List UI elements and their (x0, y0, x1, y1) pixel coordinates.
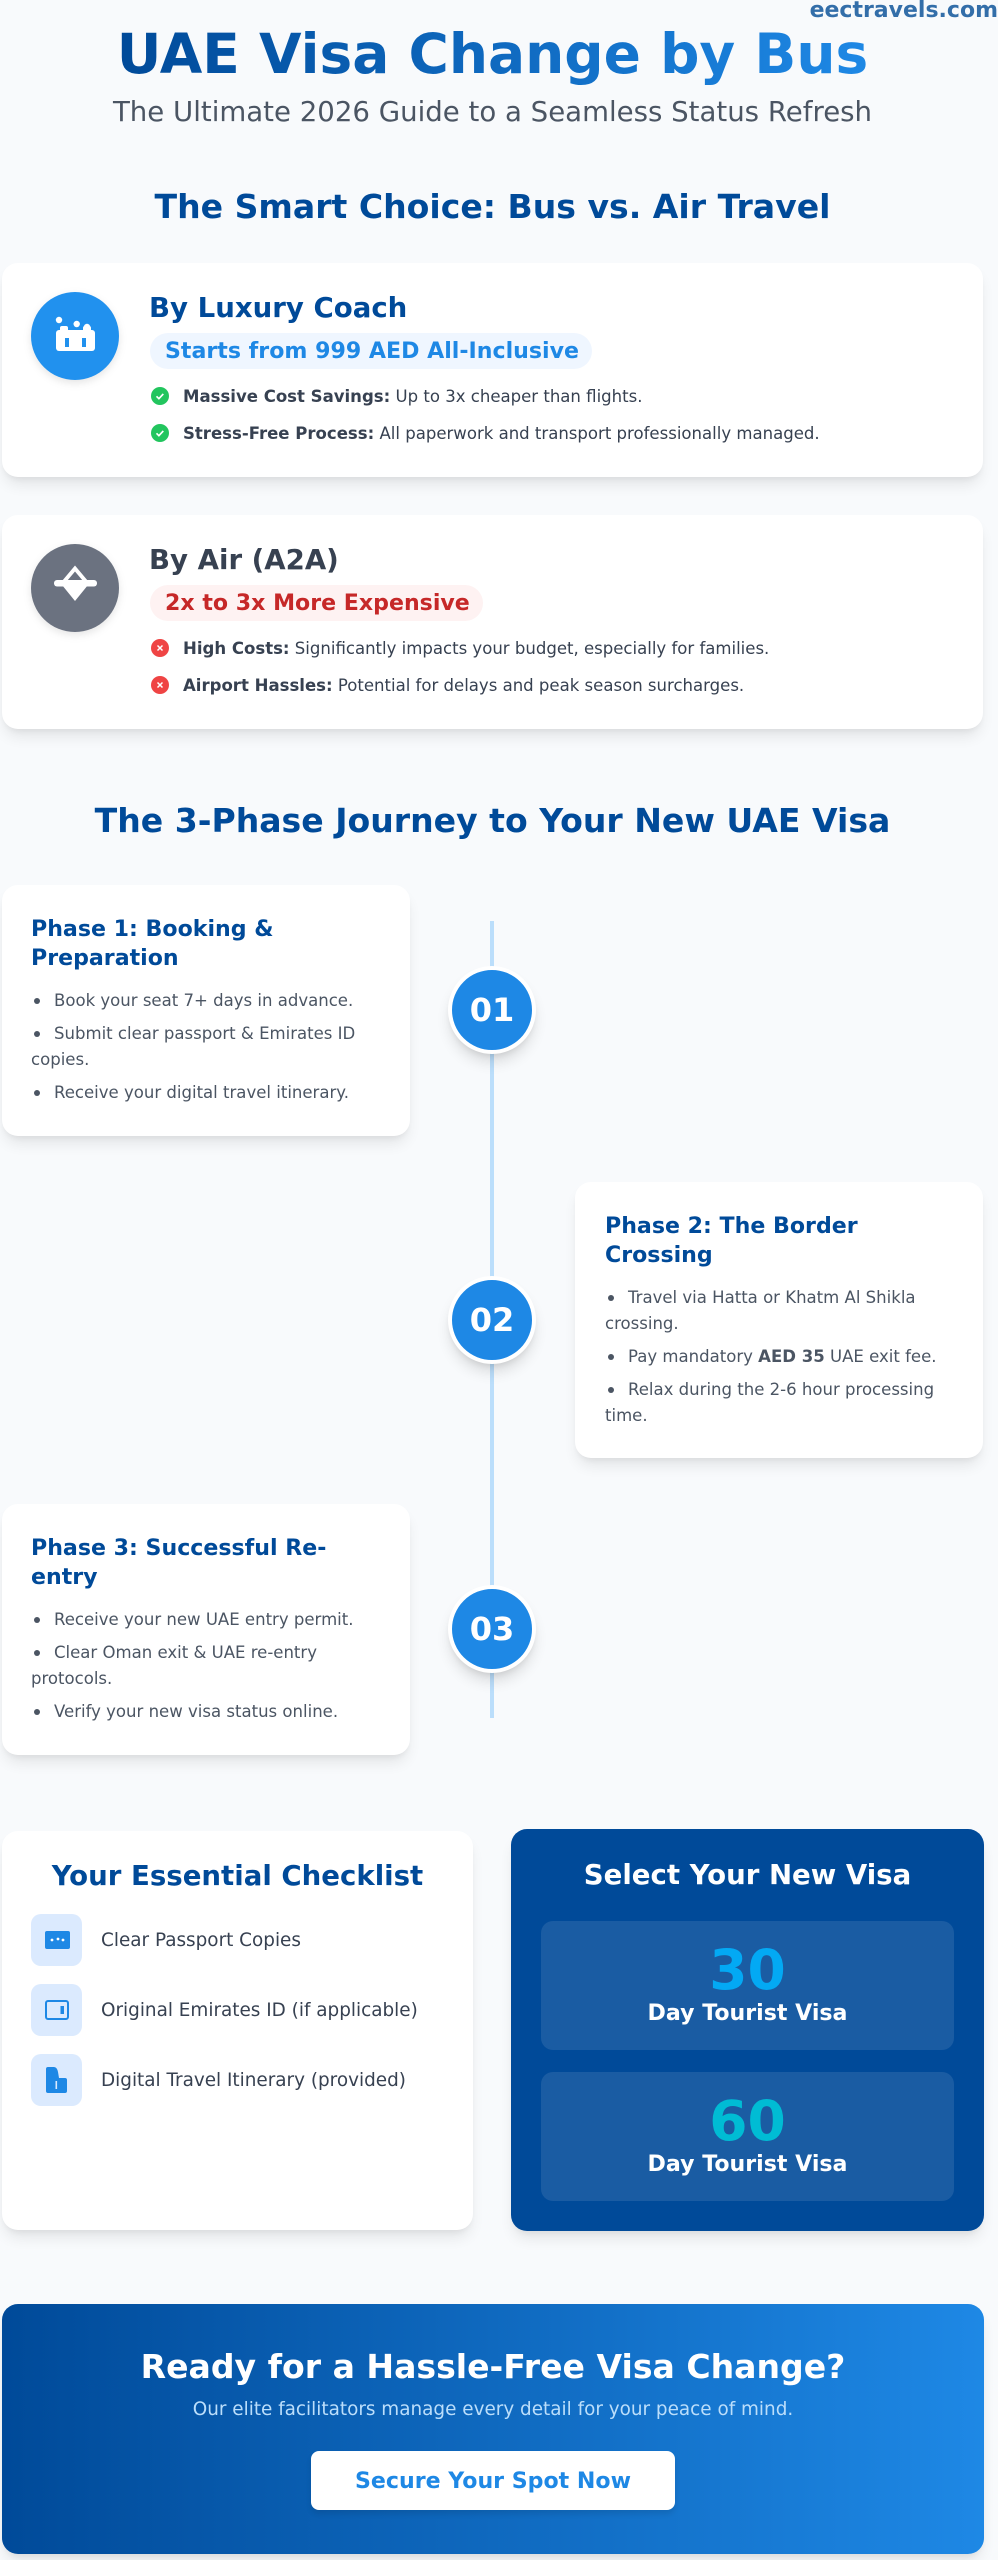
cta heading: Ready for a Hassle-Free Visa Change? (141, 2347, 845, 2386)
panel: checklist (2, 1831, 473, 2230)
icon: emirates id (31, 1984, 82, 2036)
cta text: Our elite facilitators manage every detail for your peace of mind. (193, 2399, 793, 2420)
heading: air: By Air (A2A) (149, 543, 339, 576)
phase 3 heading: entry (31, 1564, 98, 1590)
number 30: 30 (709, 1938, 786, 2002)
phase 2 list: crossing. (605, 1314, 679, 1333)
label 30: Day Tourist Visa (648, 2000, 847, 2026)
visa option: 30 day (541, 1921, 954, 2050)
drawback: high costs: High Costs: Significantly impacts your budget, especially for families. (183, 639, 769, 658)
checklist heading: Your Essential Checklist (52, 1859, 423, 1892)
heading: coach: By Luxury Coach (149, 291, 407, 324)
phase 3 heading: Phase 3: Successful Re- (31, 1535, 326, 1561)
step number 02: 02 (470, 1301, 514, 1339)
phase 3 heading (31, 1535, 326, 1590)
icon: plane (30, 544, 120, 636)
step number 01: 01 (470, 991, 514, 1029)
price pill: coach: Starts from 999 AED All-Inclusive (165, 338, 579, 364)
price pill: air: 2x to 3x More Expensive (165, 590, 470, 616)
step number 03 (448, 1585, 536, 1673)
panel: by luxury coach (2, 263, 983, 477)
timeline line (490, 921, 494, 1718)
benefit: cost savings: Massive Cost Savings: Up to 3x cheaper than flights. (183, 387, 642, 406)
phase 2 list: Relax during the 2-6 hour processing (628, 1380, 934, 1399)
heading: journey: The 3-Phase Journey to Your New UAE Visa (95, 801, 890, 840)
phase 2 heading (605, 1213, 858, 1268)
panel: phase 1 (2, 885, 410, 1136)
visa option: 60 day (541, 2072, 954, 2201)
panel: phase 3 (2, 1504, 410, 1755)
label 60: Day Tourist Visa (648, 2151, 847, 2177)
subtitle: The Ultimate 2026 Guide to a Seamless Status Refresh (113, 95, 872, 128)
phase 2 list (605, 1288, 937, 1425)
phase 3 list (31, 1610, 354, 1721)
phase 1 list: Receive your digital travel itinerary. (54, 1083, 349, 1102)
phase 3 list: Receive your new UAE entry permit. (54, 1610, 354, 1629)
phase 1 heading (31, 916, 274, 971)
price pill: air (150, 585, 483, 621)
title: UAE Visa Change by Bus (117, 22, 868, 86)
panel: phase 2 (575, 1182, 983, 1458)
cta button (311, 2451, 675, 2510)
panel: by air (2, 515, 983, 729)
phase 1 heading: Preparation (31, 945, 179, 971)
visa heading: Select Your New Visa (584, 1858, 911, 1891)
phase 1 list (31, 991, 355, 1102)
icon: itinerary (31, 2054, 82, 2106)
phase 1 list: copies. (31, 1050, 89, 1069)
drawback: airport hassles: Airport Hassles: Potential for delays and peak season surcharges. (183, 676, 744, 695)
phase 1 list: Submit clear passport & Emirates ID (54, 1024, 355, 1043)
phase 3 list: Verify your new visa status online. (54, 1702, 338, 1721)
heading: smart choice: The Smart Choice: Bus vs. Air Travel (155, 187, 830, 226)
number 60: 60 (709, 2089, 786, 2153)
icon: passport (31, 1914, 82, 1966)
panel: select visa (511, 1829, 984, 2231)
phase 2 heading: Crossing (605, 1242, 713, 1268)
price pill: coach (150, 333, 592, 369)
cta button: Secure Your Spot Now (355, 2468, 631, 2494)
phase 1 heading: Phase 1: Booking & (31, 916, 274, 942)
checklist item: emirates id: Original Emirates ID (if applicable) (101, 2000, 418, 2021)
phase 2 list: Pay mandatory AED 35 UAE exit fee. (628, 1347, 937, 1366)
benefit: stress free: Stress-Free Process: All paperwork and transport professionally managed. (183, 424, 820, 443)
step number 01 (448, 966, 536, 1054)
step number 03: 03 (470, 1610, 514, 1648)
phase 2 list: Travel via Hatta or Khatm Al Shikla (628, 1288, 916, 1307)
panel: call to action (2, 2304, 984, 2554)
phase 2 heading: Phase 2: The Border (605, 1213, 858, 1239)
phase 1 list: Book your seat 7+ days in advance. (54, 991, 353, 1010)
icon: bus (30, 292, 120, 384)
phase 3 list: protocols. (31, 1669, 112, 1688)
checklist item: itinerary: Digital Travel Itinerary (provided) (101, 2070, 406, 2091)
checklist item: passport: Clear Passport Copies (101, 1930, 301, 1951)
phase 2 list: time. (605, 1406, 648, 1425)
phase 3 list: Clear Oman exit & UAE re-entry (54, 1643, 317, 1662)
step number 02 (448, 1276, 536, 1364)
